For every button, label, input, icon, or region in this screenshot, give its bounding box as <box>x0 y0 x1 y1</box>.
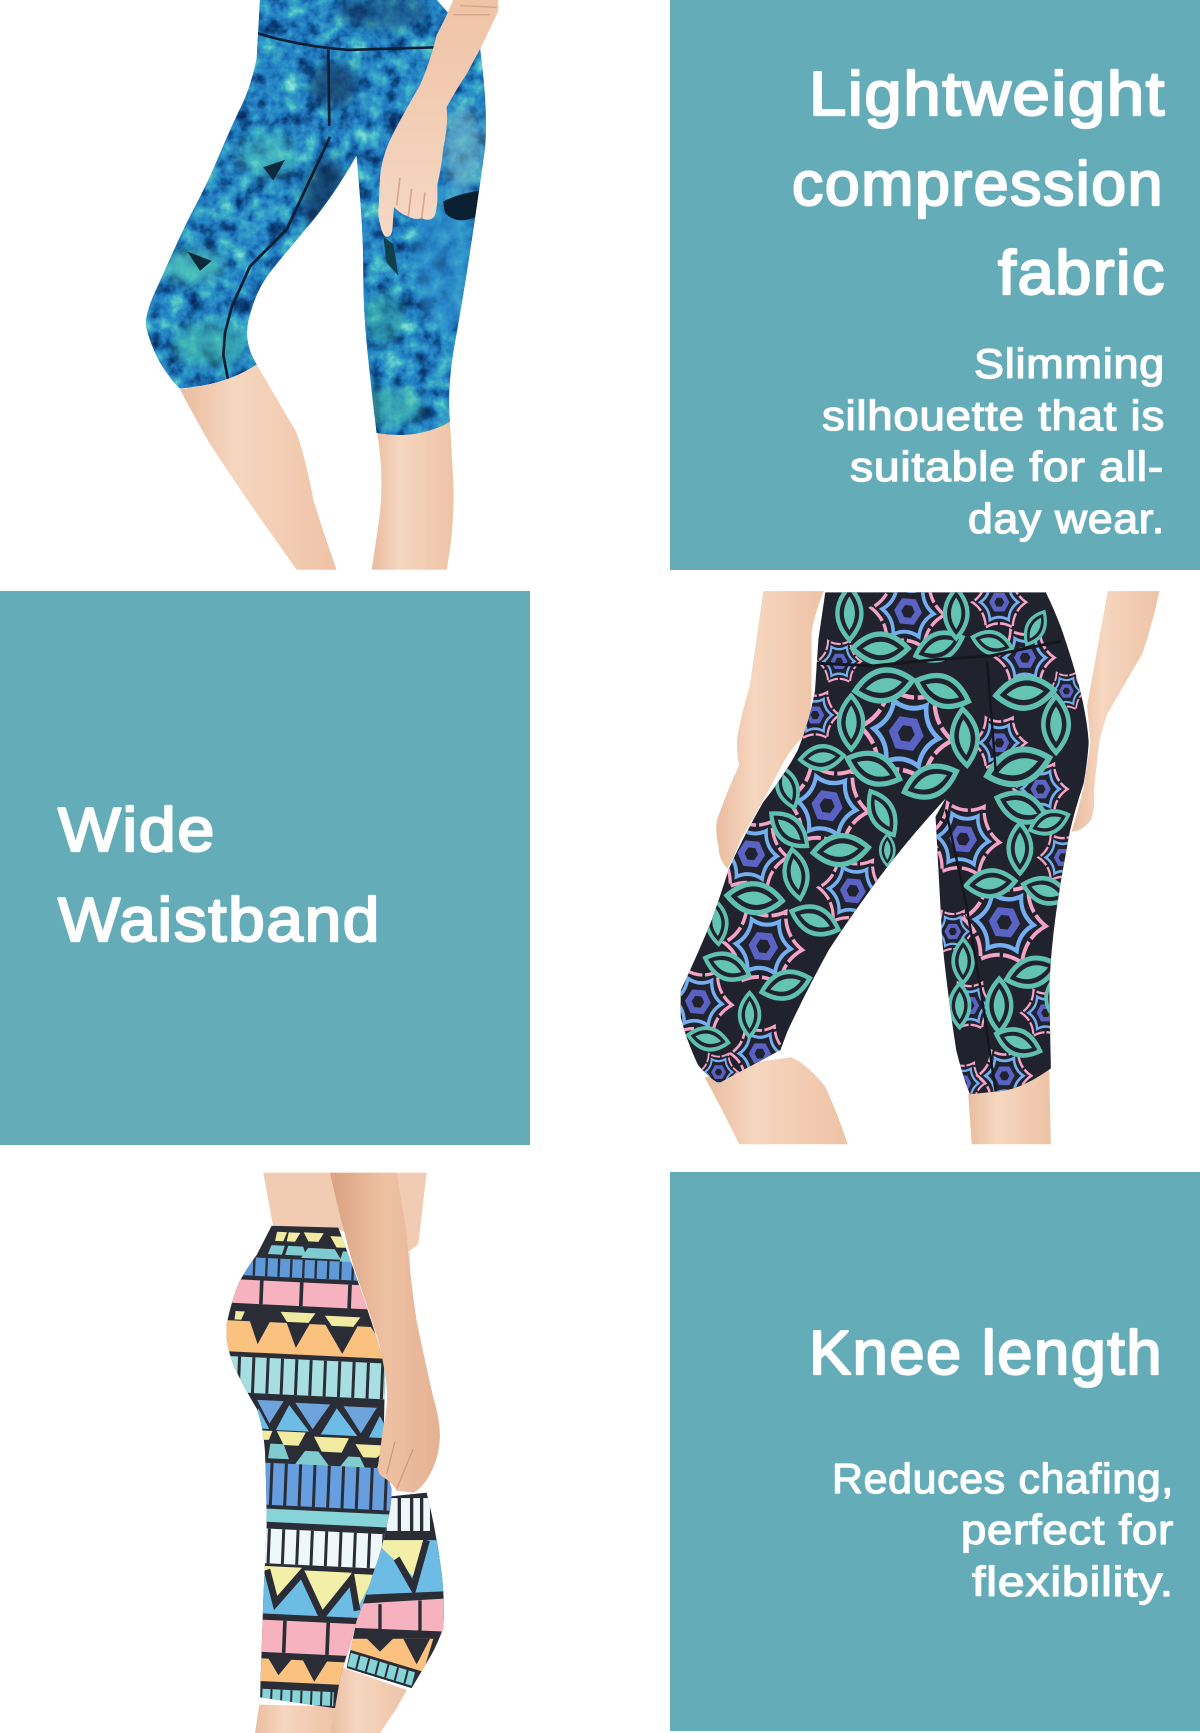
text: slimming silhouette description: silhouette that is <box>822 392 1165 439</box>
heading: wide waistband: Waistband <box>58 886 381 955</box>
orange band with triangles <box>226 1320 382 1359</box>
lower pink band <box>262 1620 356 1656</box>
blue stripes <box>255 1483 402 1490</box>
pink band <box>232 1279 368 1310</box>
yellow and teal trapezoids <box>260 1430 391 1459</box>
leggings with star pattern <box>680 592 1089 1094</box>
text: slimming silhouette description <box>822 340 1165 542</box>
waistband bands <box>275 1231 350 1248</box>
stars <box>680 592 1082 1094</box>
photo: tribal stripe leggings <box>207 1173 447 1733</box>
hem stripes <box>240 1695 334 1699</box>
heading: lightweight compression fabric: Lightweight <box>809 60 1166 129</box>
legs <box>180 364 454 570</box>
heading: lightweight compression fabric: compression <box>792 150 1164 219</box>
text: reduces chafing description: flexibility. <box>972 1558 1174 1605</box>
panel: wide waistband <box>0 591 530 1145</box>
heading: lightweight compression fabric <box>792 60 1166 308</box>
leaves <box>686 587 1072 1063</box>
photo: blue marble leggings <box>133 0 500 570</box>
skin: torso and legs <box>255 1173 427 1733</box>
lower orange band <box>260 1658 344 1685</box>
panel: knee length <box>670 1172 1200 1731</box>
heading: lightweight compression fabric: fabric <box>998 239 1166 308</box>
light teal stripes <box>223 1374 400 1382</box>
photo: geometric star print leggings <box>661 574 1159 1144</box>
back leg pattern <box>343 1489 447 1694</box>
heading: wide waistband: Wide <box>58 796 216 865</box>
arm and hand <box>378 0 498 237</box>
blue and yellow triangles <box>262 1570 373 1618</box>
text: reduces chafing description: perfect for <box>961 1506 1174 1553</box>
front leg pattern <box>226 1226 392 1708</box>
panel: lightweight compression fabric <box>670 0 1200 570</box>
leggings and top with marble print <box>133 0 500 444</box>
blue triangles <box>256 1400 377 1434</box>
teal band <box>266 1508 390 1528</box>
text: slimming silhouette description: day wear. <box>968 495 1165 542</box>
text: reduces chafing description: Reduces chafing, <box>832 1455 1174 1502</box>
text: reduces chafing description <box>832 1455 1174 1605</box>
arm <box>330 1173 440 1493</box>
text: slimming silhouette description: suitable for all- <box>850 443 1164 490</box>
text: slimming silhouette description: Slimming <box>974 340 1165 387</box>
white stripes <box>253 1545 386 1552</box>
arms and legs <box>705 591 1159 1144</box>
heading: wide waistband <box>58 796 381 955</box>
heading: knee length: Knee length <box>809 1319 1163 1388</box>
